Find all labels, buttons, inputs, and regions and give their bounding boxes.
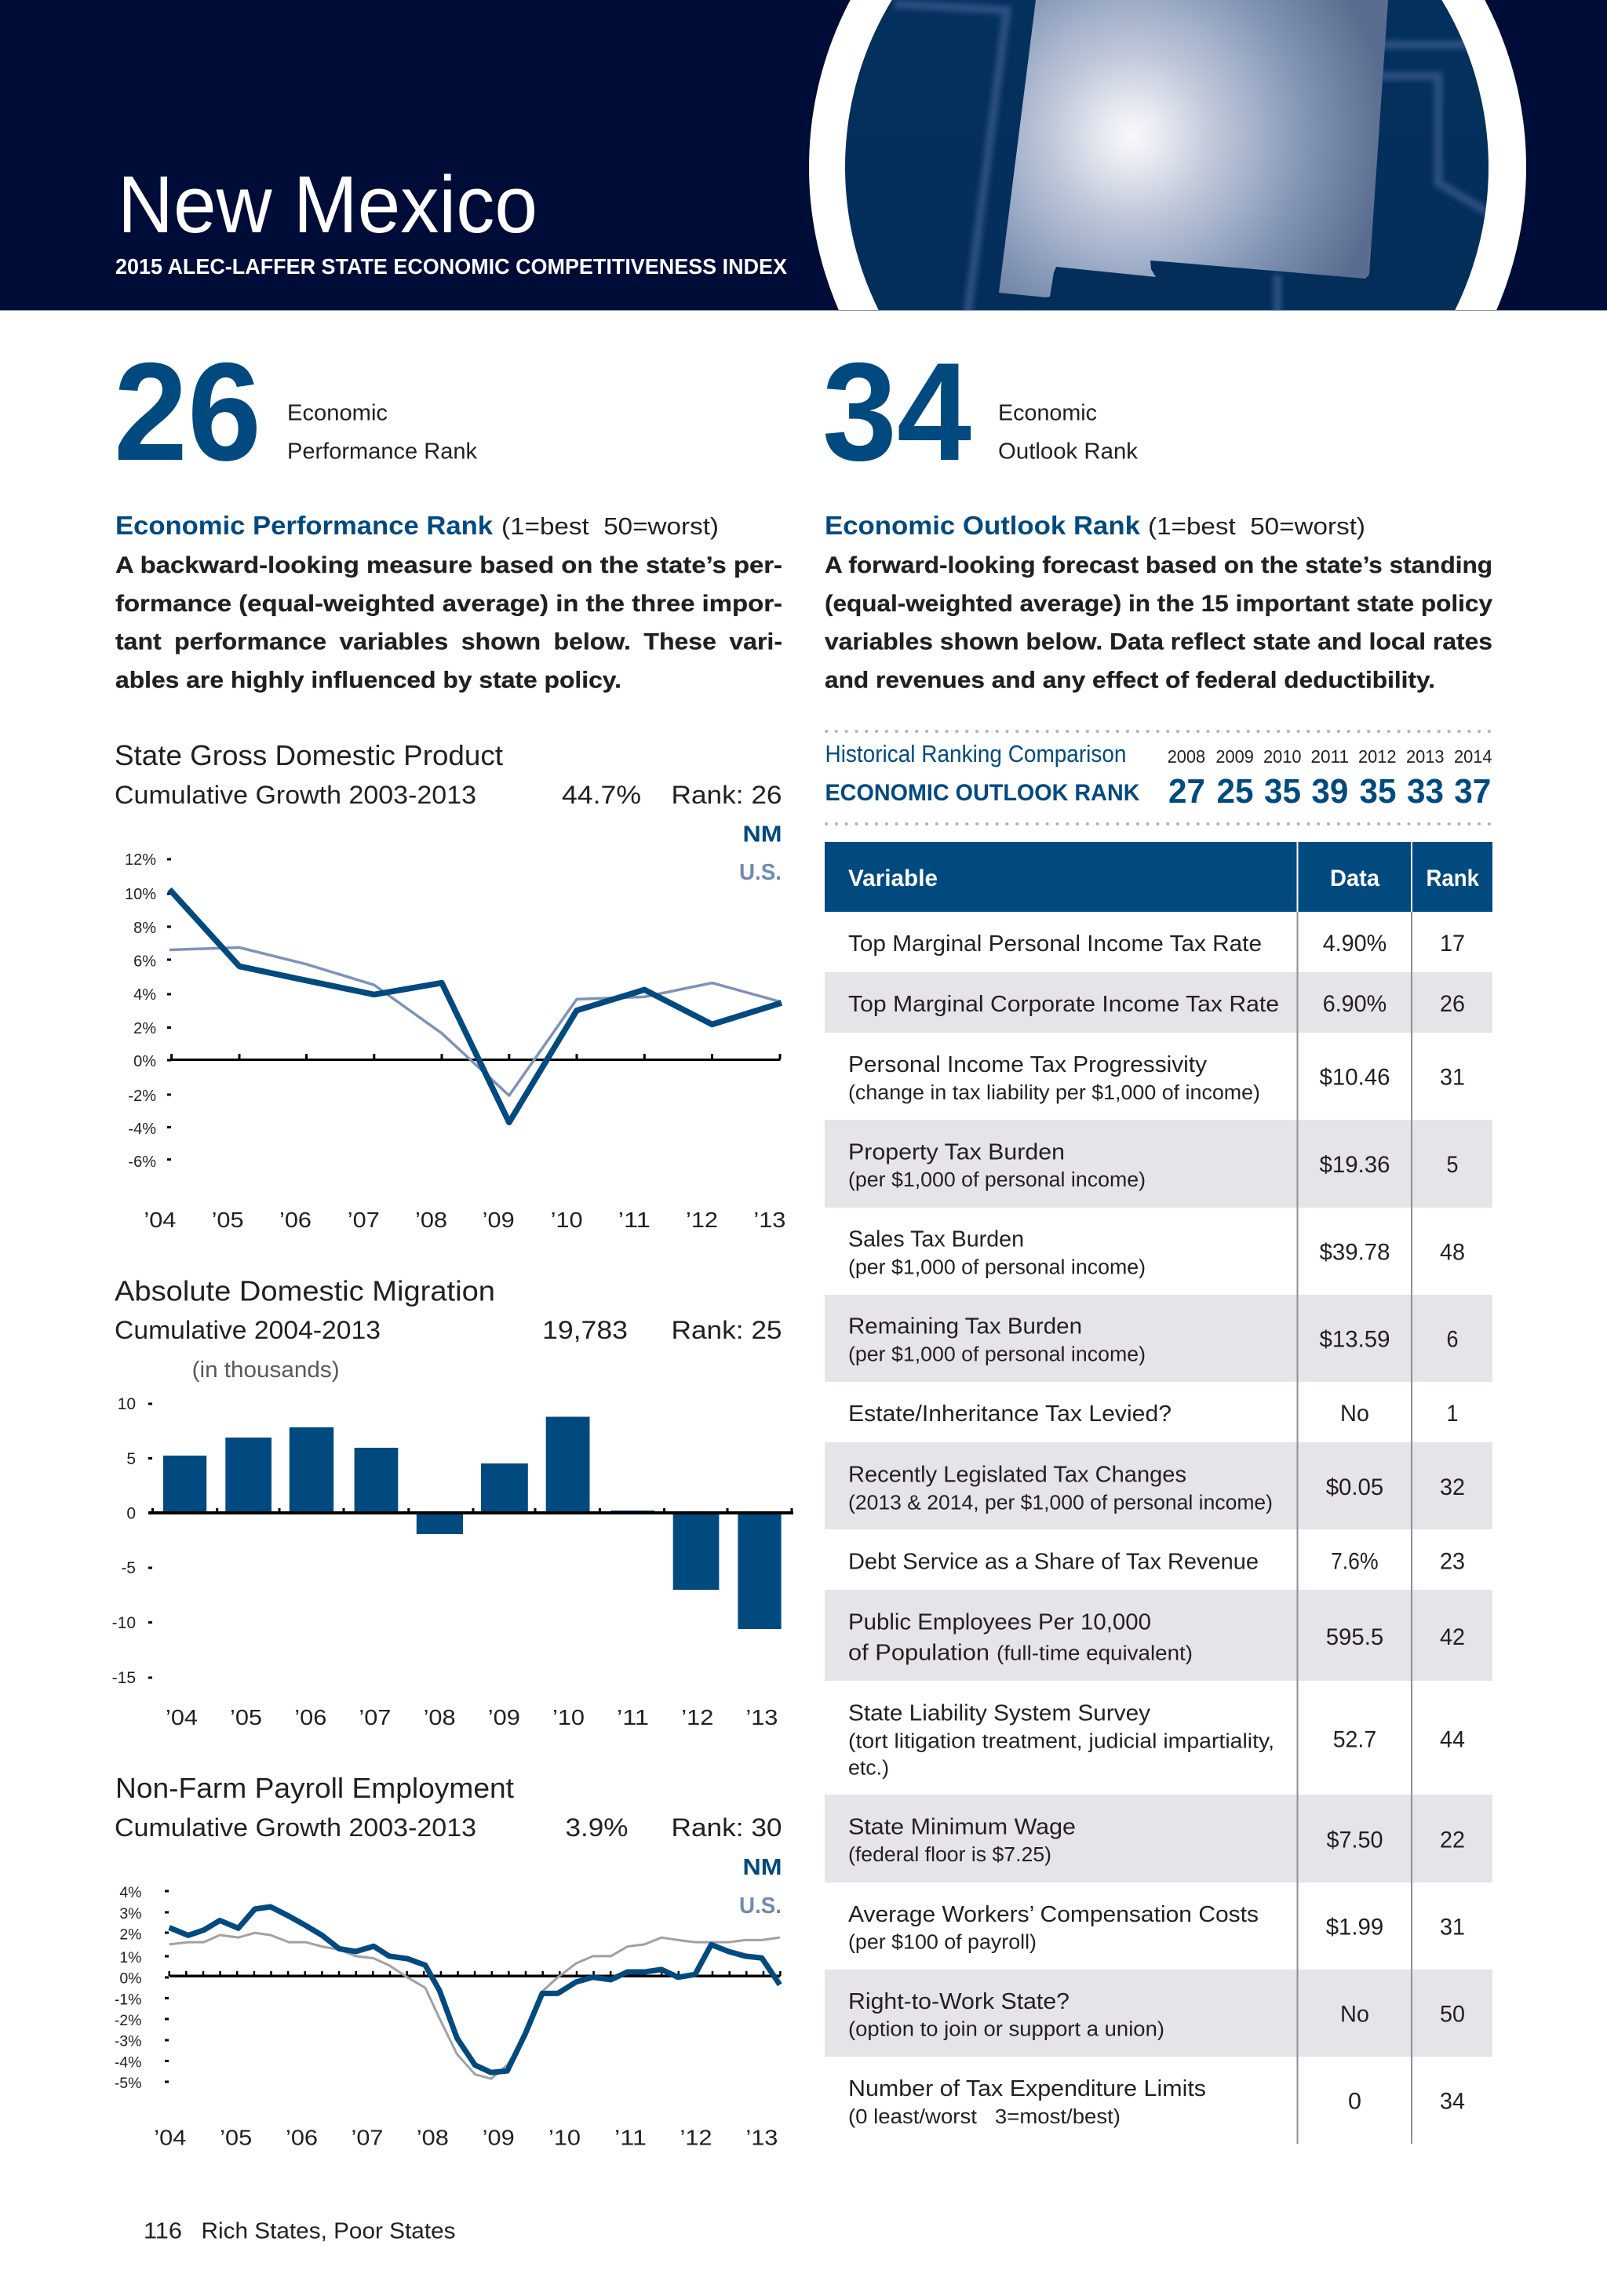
table header: Variable bbox=[848, 866, 938, 891]
row: top marginal corporate income tax rate bbox=[848, 991, 1465, 1017]
x axis labels: ’10 bbox=[552, 1705, 585, 1729]
chart heading: Rank: 26 bbox=[672, 781, 782, 809]
text block: economic outlook description: variables shown below. Data reflect state and local rates bbox=[825, 629, 1492, 654]
y axis labels: -2% bbox=[128, 1088, 156, 1105]
ranks row bbox=[1168, 772, 1491, 811]
row: recently legislated tax changes: 32 bbox=[1440, 1474, 1465, 1500]
row: sales tax burden: 48 bbox=[1440, 1239, 1465, 1265]
text block: economic performance description: formance (equal-weighted average) in the three impor- bbox=[115, 591, 782, 617]
row: estate inheritance tax: 1 bbox=[1447, 1401, 1458, 1427]
row: recently legislated tax changes: $0.05 bbox=[1326, 1474, 1383, 1500]
chart panel: absolute domestic migration bbox=[112, 1275, 793, 1729]
chart panel: non-farm payroll employment bbox=[115, 1772, 782, 2150]
icon: New Mexico state shape bbox=[999, 0, 1388, 297]
row: recently legislated tax changes: (2013 & 2014, per $1,000 of personal income) bbox=[848, 1492, 1273, 1514]
row: right-to-work state: No bbox=[1340, 2002, 1369, 2028]
row: top marginal personal income tax rate: 17 bbox=[1440, 931, 1465, 957]
economic performance rank number: Economic bbox=[287, 400, 388, 425]
text block: economic outlook description: (equal-weighted average) in the 15 important state policy bbox=[825, 591, 1493, 617]
row: top marginal corporate income tax rate: Top Marginal Corporate Income Tax Rate bbox=[848, 992, 1279, 1017]
row: debt service: 7.6% bbox=[1331, 1548, 1379, 1574]
y axis labels: -6% bbox=[128, 1153, 156, 1171]
chart heading bbox=[115, 1275, 782, 1383]
row: average workers compensation costs: $1.99 bbox=[1326, 1915, 1383, 1941]
row: personal income tax progressivity: 31 bbox=[1440, 1065, 1465, 1091]
y axis labels: -2% bbox=[115, 2012, 141, 2029]
chart heading: 3.9% bbox=[565, 1813, 628, 1842]
table header bbox=[825, 842, 1492, 912]
text block: economic performance description: tant performance variables shown below. These vari- bbox=[115, 629, 782, 654]
row: public employees: 42 bbox=[1440, 1624, 1465, 1650]
y axis labels: 4% bbox=[119, 1884, 141, 1901]
row: sales tax burden bbox=[848, 1227, 1465, 1278]
y axis labels: 0 bbox=[126, 1505, 136, 1522]
row: personal income tax progressivity: $10.46 bbox=[1320, 1065, 1390, 1091]
row: average workers compensation costs bbox=[848, 1902, 1465, 1953]
x axis labels: ’12 bbox=[686, 1208, 718, 1232]
row: property tax burden: 5 bbox=[1447, 1152, 1458, 1178]
y axis labels: 2% bbox=[133, 1020, 156, 1037]
row: state minimum wage: (federal floor is $7.25) bbox=[848, 1844, 1051, 1866]
row: top marginal corporate income tax rate: 26 bbox=[1440, 991, 1465, 1017]
row: public employees: of Population bbox=[848, 1640, 989, 1665]
row: estate inheritance tax: No bbox=[1340, 1401, 1369, 1427]
chart heading: (in thousands) bbox=[192, 1358, 340, 1383]
ranks row: 39 bbox=[1311, 772, 1348, 811]
chart heading: Cumulative Growth 2003-2013 bbox=[115, 1813, 476, 1842]
y axis labels: -3% bbox=[115, 2032, 141, 2050]
chart heading: Rank: 25 bbox=[672, 1316, 782, 1344]
years row: 2009 bbox=[1215, 746, 1254, 767]
table header: Data bbox=[1330, 866, 1379, 891]
row: average workers compensation costs: (per $100 of payroll) bbox=[848, 1931, 1037, 1953]
x axis labels: ’10 bbox=[548, 2126, 581, 2150]
x axis labels: ’07 bbox=[359, 1705, 391, 1729]
chart heading bbox=[115, 739, 782, 809]
footer page number: Rich States, Poor States bbox=[201, 2218, 455, 2243]
x axis labels: ’09 bbox=[483, 2126, 515, 2150]
x axis labels: ’12 bbox=[681, 1705, 713, 1729]
y axis labels bbox=[115, 1884, 141, 2092]
header banner bbox=[0, 0, 1607, 311]
x axis labels: ’08 bbox=[415, 1208, 447, 1232]
row: average workers compensation costs: Average Workers’ Compensation Costs bbox=[848, 1902, 1259, 1927]
y axis labels: 3% bbox=[119, 1905, 141, 1922]
x axis labels: ’11 bbox=[618, 1208, 650, 1232]
y axis labels: 0% bbox=[119, 1970, 141, 1987]
text block: economic performance description bbox=[115, 511, 782, 694]
row: public employees bbox=[848, 1609, 1465, 1665]
x axis labels: ’06 bbox=[279, 1208, 312, 1232]
row: debt service: Debt Service as a Share of Tax Revenue bbox=[848, 1549, 1259, 1574]
y axis labels bbox=[112, 1395, 136, 1687]
table header: Rank bbox=[1427, 866, 1479, 891]
legend bbox=[739, 822, 782, 885]
text block: economic outlook description bbox=[825, 511, 1493, 694]
row: estate inheritance tax: Estate/Inheritance Tax Levied? bbox=[848, 1401, 1172, 1427]
y axis labels: 10 bbox=[118, 1395, 136, 1413]
years row: 2013 bbox=[1406, 746, 1444, 767]
years row: 2014 bbox=[1454, 746, 1492, 767]
ranks row: 33 bbox=[1407, 772, 1444, 811]
x axis labels: ’04 bbox=[166, 1705, 198, 1729]
row: personal income tax progressivity: Personal Income Tax Progressivity bbox=[848, 1052, 1208, 1077]
text block: economic outlook description: Economic Outlook Rank bbox=[825, 511, 1141, 540]
row: property tax burden bbox=[848, 1140, 1458, 1191]
line: NM GDP bbox=[169, 889, 782, 1122]
y axis labels: 12% bbox=[125, 851, 156, 869]
y axis labels: -1% bbox=[115, 1992, 141, 2009]
legend: U.S. bbox=[739, 1893, 782, 1919]
row: state liability system survey: etc.) bbox=[848, 1757, 889, 1779]
text block: economic outlook description: A forward-looking forecast based on the state’s standing bbox=[825, 552, 1492, 578]
row: right-to-work state: 50 bbox=[1440, 2002, 1465, 2028]
row: remaining tax burden bbox=[848, 1314, 1458, 1366]
row: remaining tax burden: (per $1,000 of personal income) bbox=[848, 1344, 1146, 1366]
row: property tax burden: $19.36 bbox=[1320, 1152, 1390, 1178]
chart heading: Absolute Domestic Migration bbox=[115, 1275, 495, 1307]
row: remaining tax burden: 6 bbox=[1447, 1327, 1458, 1353]
text block: economic outlook description: and revenues and any effect of federal deductibility. bbox=[825, 667, 1435, 694]
row: right-to-work state: Right-to-Work State? bbox=[848, 1989, 1070, 2014]
x axis labels bbox=[154, 2126, 778, 2150]
economic outlook rank number: Outlook Rank bbox=[998, 439, 1139, 465]
row: public employees: Public Employees Per 10,000 bbox=[848, 1609, 1151, 1635]
row: remaining tax burden: $13.59 bbox=[1320, 1327, 1390, 1353]
legend: U.S. bbox=[739, 860, 782, 885]
y axis labels bbox=[125, 851, 156, 1171]
row: number of tax expenditure limits: 0 bbox=[1348, 2089, 1361, 2115]
y axis labels: 2% bbox=[119, 1926, 141, 1943]
x axis labels: ’05 bbox=[230, 1705, 262, 1729]
row: state liability system survey: 44 bbox=[1440, 1727, 1465, 1753]
row: state minimum wage: State Minimum Wage bbox=[848, 1814, 1076, 1839]
row: estate inheritance tax bbox=[848, 1401, 1458, 1427]
x axis labels: ’08 bbox=[424, 1705, 456, 1729]
footer page number: 116 bbox=[144, 2218, 182, 2243]
chart heading: 44.7% bbox=[562, 781, 641, 809]
y axis labels: -4% bbox=[115, 2054, 141, 2072]
chart panel: state gross domestic product bbox=[115, 739, 785, 1232]
title: New Mexico bbox=[118, 159, 537, 250]
x axis labels: ’11 bbox=[614, 2126, 647, 2150]
row: recently legislated tax changes bbox=[848, 1462, 1465, 1514]
y axis labels: 5 bbox=[126, 1450, 136, 1468]
legend bbox=[739, 1855, 782, 1919]
legend: NM bbox=[742, 1855, 782, 1880]
text block: economic performance description: (1=best 50=worst) bbox=[501, 512, 719, 540]
bar chart bars bbox=[163, 1417, 782, 1629]
x axis labels: ’04 bbox=[144, 1208, 176, 1232]
row: top marginal corporate income tax rate: 6.90% bbox=[1323, 991, 1387, 1017]
row: sales tax burden: $39.78 bbox=[1320, 1239, 1390, 1265]
row: right-to-work state: (option to join or support a union) bbox=[848, 2019, 1164, 2041]
row: top marginal personal income tax rate: 4.90% bbox=[1323, 931, 1387, 957]
y axis labels: -4% bbox=[128, 1121, 156, 1138]
y axis labels: 8% bbox=[133, 920, 156, 937]
x axis labels: ’13 bbox=[753, 1208, 785, 1232]
chart heading: Cumulative Growth 2003-2013 bbox=[115, 781, 476, 809]
row: top marginal personal income tax rate bbox=[848, 931, 1465, 957]
chart heading: Cumulative 2004-2013 bbox=[115, 1316, 381, 1344]
y axis labels: 1% bbox=[119, 1949, 141, 1966]
y axis labels: 10% bbox=[125, 886, 156, 903]
economic performance rank number: Performance Rank bbox=[287, 439, 477, 465]
row: state liability system survey bbox=[848, 1701, 1465, 1779]
years row: 2008 bbox=[1168, 746, 1205, 767]
y axis labels: -10 bbox=[112, 1614, 136, 1632]
x axis labels: ’05 bbox=[212, 1208, 244, 1232]
row: recently legislated tax changes: Recently Legislated Tax Changes bbox=[848, 1462, 1186, 1487]
years row: 2011 bbox=[1310, 746, 1349, 767]
row: number of tax expenditure limits: Number of Tax Expenditure Limits bbox=[848, 2076, 1206, 2101]
x axis labels: ’07 bbox=[348, 1208, 380, 1232]
ranks row: 27 bbox=[1168, 772, 1205, 811]
text block: economic performance description: Economic Performance Rank bbox=[115, 511, 494, 540]
chart heading: Non-Farm Payroll Employment bbox=[115, 1772, 514, 1804]
table: state policy variables bbox=[825, 842, 1492, 2144]
chart heading: State Gross Domestic Product bbox=[115, 739, 503, 771]
row: remaining tax burden: Remaining Tax Burden bbox=[848, 1314, 1082, 1339]
x axis labels bbox=[144, 1208, 785, 1232]
x axis labels: ’09 bbox=[488, 1705, 520, 1729]
text block: economic performance description: A backward-looking measure based on the state’s per- bbox=[115, 552, 782, 578]
x axis labels: ’10 bbox=[551, 1208, 583, 1232]
row: state liability system survey: State Liability System Survey bbox=[848, 1701, 1151, 1726]
panel: historical ranking comparison: ECONOMIC OUTLOOK RANK bbox=[825, 780, 1140, 806]
row: debt service bbox=[848, 1548, 1465, 1574]
economic performance rank number bbox=[114, 333, 477, 490]
text block: economic outlook description: (1=best 50=worst) bbox=[1148, 512, 1365, 540]
x axis labels: ’12 bbox=[680, 2126, 712, 2150]
y axis labels: -5 bbox=[121, 1559, 136, 1577]
row: state minimum wage: $7.50 bbox=[1326, 1827, 1383, 1853]
x axis labels: ’07 bbox=[352, 2126, 383, 2150]
y axis labels: 4% bbox=[133, 986, 156, 1004]
economic outlook rank number: 34 bbox=[822, 333, 971, 490]
x axis labels: ’06 bbox=[294, 1705, 326, 1729]
state map medallion bbox=[809, 0, 1526, 310]
years row bbox=[1168, 746, 1492, 767]
chart heading bbox=[115, 1772, 782, 1842]
ranks row: 25 bbox=[1216, 772, 1254, 811]
row: state liability system survey: 52.7 bbox=[1333, 1727, 1376, 1753]
x axis labels bbox=[166, 1705, 778, 1729]
line: NM employment bbox=[169, 1907, 780, 2072]
years row: 2012 bbox=[1358, 746, 1397, 767]
row: personal income tax progressivity bbox=[848, 1052, 1465, 1104]
ranks row: 37 bbox=[1454, 772, 1491, 811]
row: number of tax expenditure limits: 34 bbox=[1440, 2089, 1465, 2115]
row: state minimum wage: 22 bbox=[1440, 1827, 1465, 1853]
line: U.S. GDP bbox=[169, 948, 780, 1095]
x axis labels: ’11 bbox=[617, 1705, 649, 1729]
row: state liability system survey: (tort litigation treatment, judicial impartiality, bbox=[848, 1730, 1274, 1752]
y axis labels: 0% bbox=[133, 1053, 156, 1070]
row: property tax burden: Property Tax Burden bbox=[848, 1140, 1065, 1165]
chart heading: 19,783 bbox=[542, 1316, 628, 1344]
legend: NM bbox=[742, 822, 782, 847]
row: sales tax burden: (per $1,000 of personal income) bbox=[848, 1256, 1146, 1278]
x axis labels: ’13 bbox=[745, 1705, 778, 1729]
x axis labels: ’04 bbox=[154, 2126, 186, 2150]
row: top marginal personal income tax rate: Top Marginal Personal Income Tax Rate bbox=[848, 931, 1262, 957]
x axis labels: ’13 bbox=[745, 2126, 778, 2150]
subtitle: 2015 ALEC-LAFFER STATE ECONOMIC COMPETITIVENESS INDEX bbox=[115, 254, 787, 279]
row: number of tax expenditure limits bbox=[848, 2076, 1465, 2128]
x axis labels: ’09 bbox=[483, 1208, 515, 1232]
x axis labels: ’06 bbox=[286, 2126, 318, 2150]
table row backgrounds bbox=[825, 972, 1492, 2057]
row: public employees: 595.5 bbox=[1326, 1624, 1383, 1650]
years row: 2010 bbox=[1263, 746, 1301, 767]
ranks row: 35 bbox=[1359, 772, 1397, 811]
y axis labels: -15 bbox=[112, 1669, 136, 1687]
row: sales tax burden: Sales Tax Burden bbox=[848, 1227, 1024, 1252]
line: U.S. employment bbox=[169, 1933, 780, 2079]
row: debt service: 23 bbox=[1440, 1548, 1465, 1574]
row: property tax burden: (per $1,000 of personal income) bbox=[848, 1169, 1146, 1191]
row: state minimum wage bbox=[848, 1814, 1465, 1866]
chart heading: Rank: 30 bbox=[672, 1813, 782, 1842]
economic outlook rank number bbox=[822, 333, 1139, 490]
panel: historical ranking comparison: Historical Ranking Comparison bbox=[825, 740, 1127, 767]
x axis labels: ’05 bbox=[220, 2126, 252, 2150]
text block: economic performance description: ables are highly influenced by state policy. bbox=[115, 667, 621, 694]
ranks row: 35 bbox=[1264, 772, 1301, 811]
row: number of tax expenditure limits: (0 least/worst 3=most/best) bbox=[848, 2106, 1121, 2128]
economic outlook rank number: Economic bbox=[998, 400, 1097, 425]
economic performance rank number: 26 bbox=[114, 333, 261, 490]
row: right-to-work state bbox=[848, 1989, 1465, 2041]
x axis labels: ’08 bbox=[417, 2126, 449, 2150]
row: public employees: (full-time equivalent) bbox=[997, 1642, 1193, 1664]
y axis labels: -5% bbox=[115, 2075, 141, 2092]
panel: historical ranking comparison bbox=[825, 731, 1492, 824]
row: personal income tax progressivity: (change in tax liability per $1,000 of income) bbox=[848, 1082, 1260, 1104]
row: average workers compensation costs: 31 bbox=[1440, 1915, 1465, 1941]
y axis labels: 6% bbox=[133, 953, 156, 970]
